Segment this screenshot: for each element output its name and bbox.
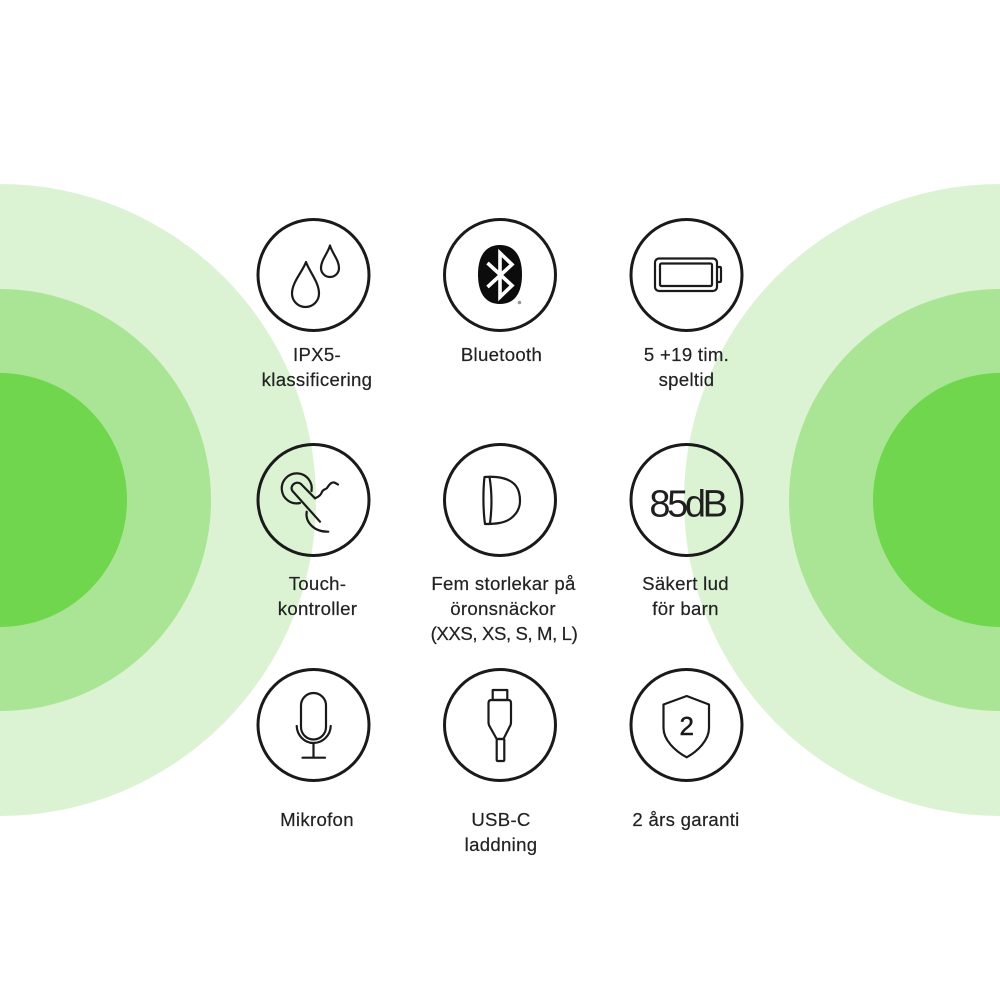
- label: play time: 5 +19 tim.: [644, 344, 729, 365]
- label: USB-C charging: USB-C: [471, 809, 531, 830]
- icon: shield with 2: 2: [679, 711, 694, 741]
- label: safe sound: för barn: [652, 598, 719, 619]
- feature: Bluetooth: [444, 220, 556, 365]
- label: microphone: Mikrofon: [280, 809, 354, 830]
- icon: USB-C connector: [488, 690, 511, 761]
- label: touch controls: kontroller: [278, 598, 357, 619]
- icon: touch finger: [282, 473, 338, 532]
- feature: safe volume for kids: [631, 444, 742, 619]
- label: IPX5: IPX5-: [293, 344, 341, 365]
- feature: USB-C charging: [444, 670, 556, 855]
- feature: microphone: [258, 670, 369, 830]
- icon: battery: [655, 258, 721, 291]
- label: USB-C charging: laddning: [465, 834, 537, 855]
- label: warranty: 2 års garanti: [632, 809, 740, 830]
- label: touch controls: Touch-: [289, 573, 346, 594]
- icon: Bluetooth logo: [478, 245, 522, 304]
- icon: water drops: [292, 246, 339, 307]
- feature: touch controls: [258, 444, 369, 619]
- label: ear tip sizes: Fem storlekar på: [431, 573, 576, 594]
- label: IPX5: klassificering: [262, 369, 372, 390]
- label: ear tip sizes: öronsnäckor: [450, 598, 556, 619]
- icon: ear tip: [483, 477, 520, 524]
- label: ear tip sizes: (XXS, XS, S, M, L): [431, 623, 578, 644]
- feature: 2 year warranty: [631, 670, 742, 830]
- feature: ear tip sizes: [431, 444, 578, 644]
- feature: IPX5 rating: [258, 220, 372, 390]
- right concentric green circles: [684, 184, 1000, 816]
- icon: microphone: [297, 693, 331, 758]
- label: Bluetooth: Bluetooth: [461, 344, 542, 365]
- feature: battery play time: [631, 220, 742, 390]
- icon: shield with 2: [664, 696, 709, 757]
- label: play time: speltid: [659, 369, 714, 390]
- label: safe sound: Säkert lud: [642, 573, 729, 594]
- left concentric green circles: [0, 184, 316, 816]
- icon: 85dB text: 85dB: [649, 484, 727, 526]
